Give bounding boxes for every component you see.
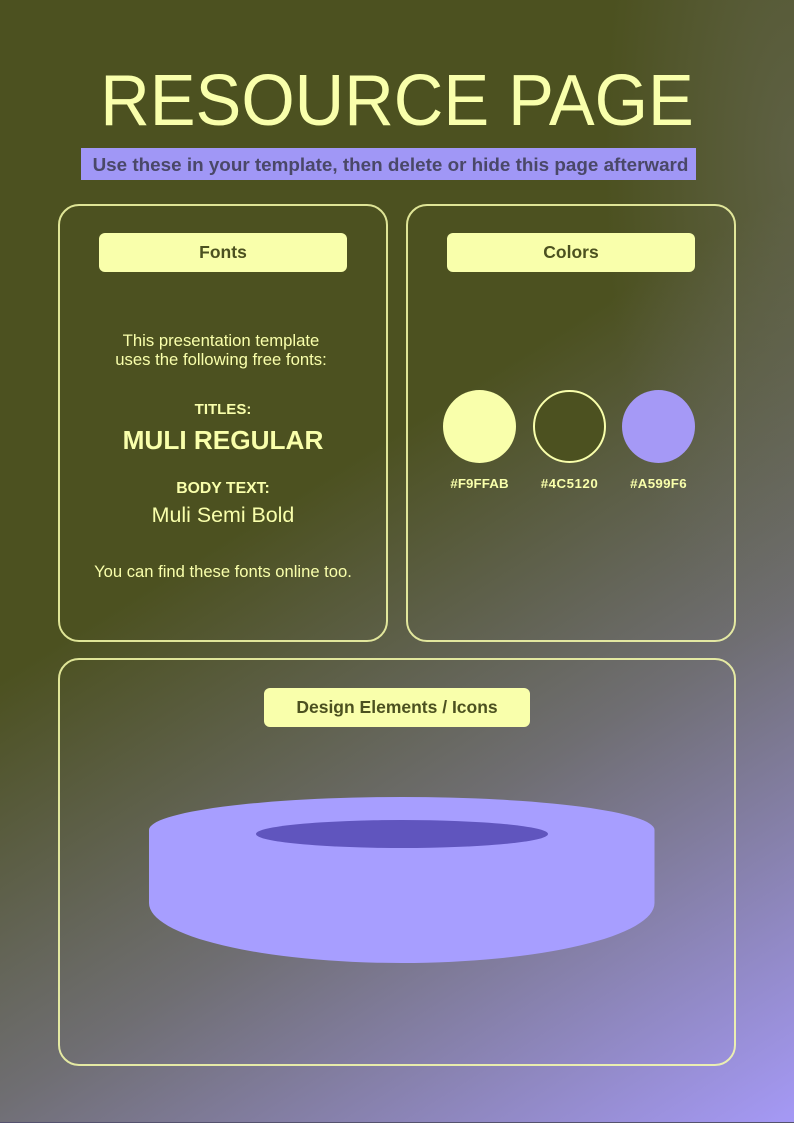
hex label 1: #F9FFAB bbox=[450, 476, 509, 490]
closing note: You can find these fonts online too. bbox=[94, 562, 352, 580]
heading: colors: Colors bbox=[543, 242, 599, 262]
icon: podium bbox=[149, 797, 654, 963]
podium body bbox=[149, 797, 654, 963]
panel: fonts bbox=[58, 204, 388, 642]
heading: colors bbox=[447, 233, 695, 272]
subtitle banner: Use these in your template, then delete or hide this page afterward bbox=[93, 154, 688, 175]
heading: fonts bbox=[99, 233, 347, 272]
intro text: This presentation template bbox=[123, 330, 319, 350]
intro text bbox=[115, 330, 327, 368]
swatch: lavender bbox=[622, 390, 695, 463]
panel: design elements bbox=[58, 658, 736, 1066]
swatch: light yellow bbox=[443, 390, 516, 463]
panel: colors bbox=[406, 204, 736, 642]
body text label: BODY TEXT: bbox=[176, 480, 270, 496]
heading: design elements: Design Elements / Icons bbox=[296, 697, 498, 717]
body font name: Muli Semi Bold bbox=[152, 502, 294, 526]
titles label: TITLES: bbox=[195, 400, 251, 418]
title: RESOURCE PAGE bbox=[100, 61, 694, 141]
heading: fonts: Fonts bbox=[199, 242, 247, 262]
swatch: olive bbox=[533, 390, 606, 463]
hex label 2: #4C5120 bbox=[541, 476, 598, 490]
intro text: uses the following free fonts: bbox=[115, 350, 327, 368]
heading: design elements bbox=[264, 688, 530, 727]
hex label 3: #A599F6 bbox=[630, 476, 687, 490]
subtitle banner bbox=[81, 148, 696, 180]
bottom edge line bbox=[0, 1122, 794, 1123]
podium recess bbox=[256, 820, 548, 848]
titles font name: MULI REGULAR bbox=[123, 424, 323, 454]
